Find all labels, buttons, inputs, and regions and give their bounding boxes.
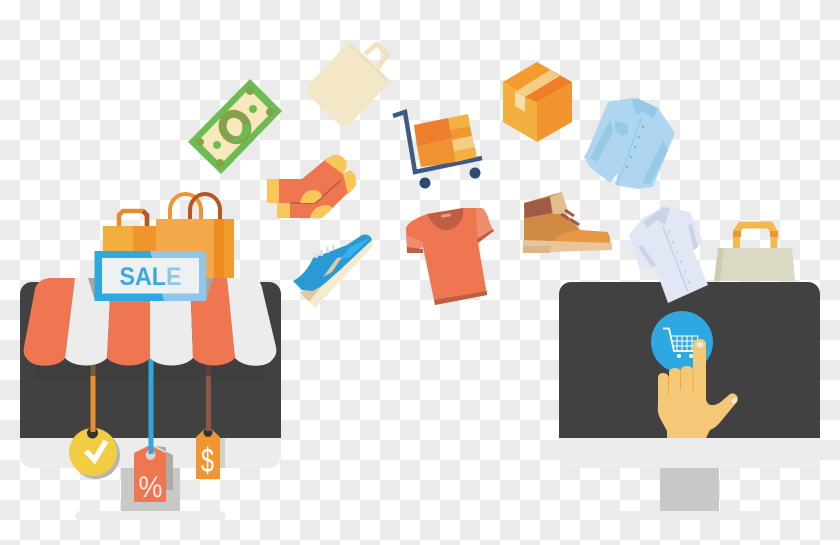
monitor chin xyxy=(559,438,820,468)
hanging strings xyxy=(90,356,211,454)
awning stripe 1 xyxy=(24,278,75,366)
percent tag xyxy=(134,425,173,504)
awning stripe 5 xyxy=(190,278,235,366)
large bag xyxy=(156,194,234,278)
monitor screen xyxy=(20,282,281,438)
sale sign xyxy=(88,251,213,301)
monitor base xyxy=(75,511,226,520)
icon: banknote xyxy=(188,79,282,174)
monitor screen xyxy=(559,282,820,438)
icon: t-shirt xyxy=(406,208,494,305)
check tag xyxy=(69,418,120,479)
icon: blue shirt xyxy=(584,98,675,189)
small bag xyxy=(103,211,157,256)
awning xyxy=(24,278,276,366)
cart button xyxy=(651,311,713,373)
monitor base xyxy=(614,511,765,520)
percent tag: % xyxy=(138,471,162,504)
awning stripe 2 xyxy=(65,278,111,366)
icon: socks xyxy=(267,155,356,218)
icon: pointing hand xyxy=(658,339,738,438)
monitor stand xyxy=(660,468,719,511)
icon: sneaker xyxy=(293,235,373,308)
icon: shopping cart xyxy=(663,328,698,358)
sign frame xyxy=(94,251,206,301)
awning shadow xyxy=(36,362,264,380)
icon: hand truck with boxes xyxy=(393,112,482,188)
right monitor xyxy=(559,282,820,520)
icon: tote bag xyxy=(307,41,391,126)
left monitor: storefront xyxy=(20,282,281,520)
sale text: SALE xyxy=(120,263,182,291)
awning stripe 4 xyxy=(150,278,193,366)
icon: boot xyxy=(523,192,612,253)
dollar tag xyxy=(196,418,225,480)
dollar tag: $ xyxy=(201,442,214,480)
button circle xyxy=(651,311,713,373)
monitor stand xyxy=(121,468,180,511)
shopping bags on the store xyxy=(103,194,234,278)
icon: white shirt xyxy=(629,207,708,303)
icon: beige bag xyxy=(714,225,795,281)
awning stripe 3 xyxy=(107,278,150,366)
icon: cardboard box xyxy=(503,62,572,142)
monitor chin xyxy=(20,438,281,468)
awning stripe 6 xyxy=(227,278,276,366)
sign shadows xyxy=(88,278,213,301)
sign panel xyxy=(102,258,199,294)
